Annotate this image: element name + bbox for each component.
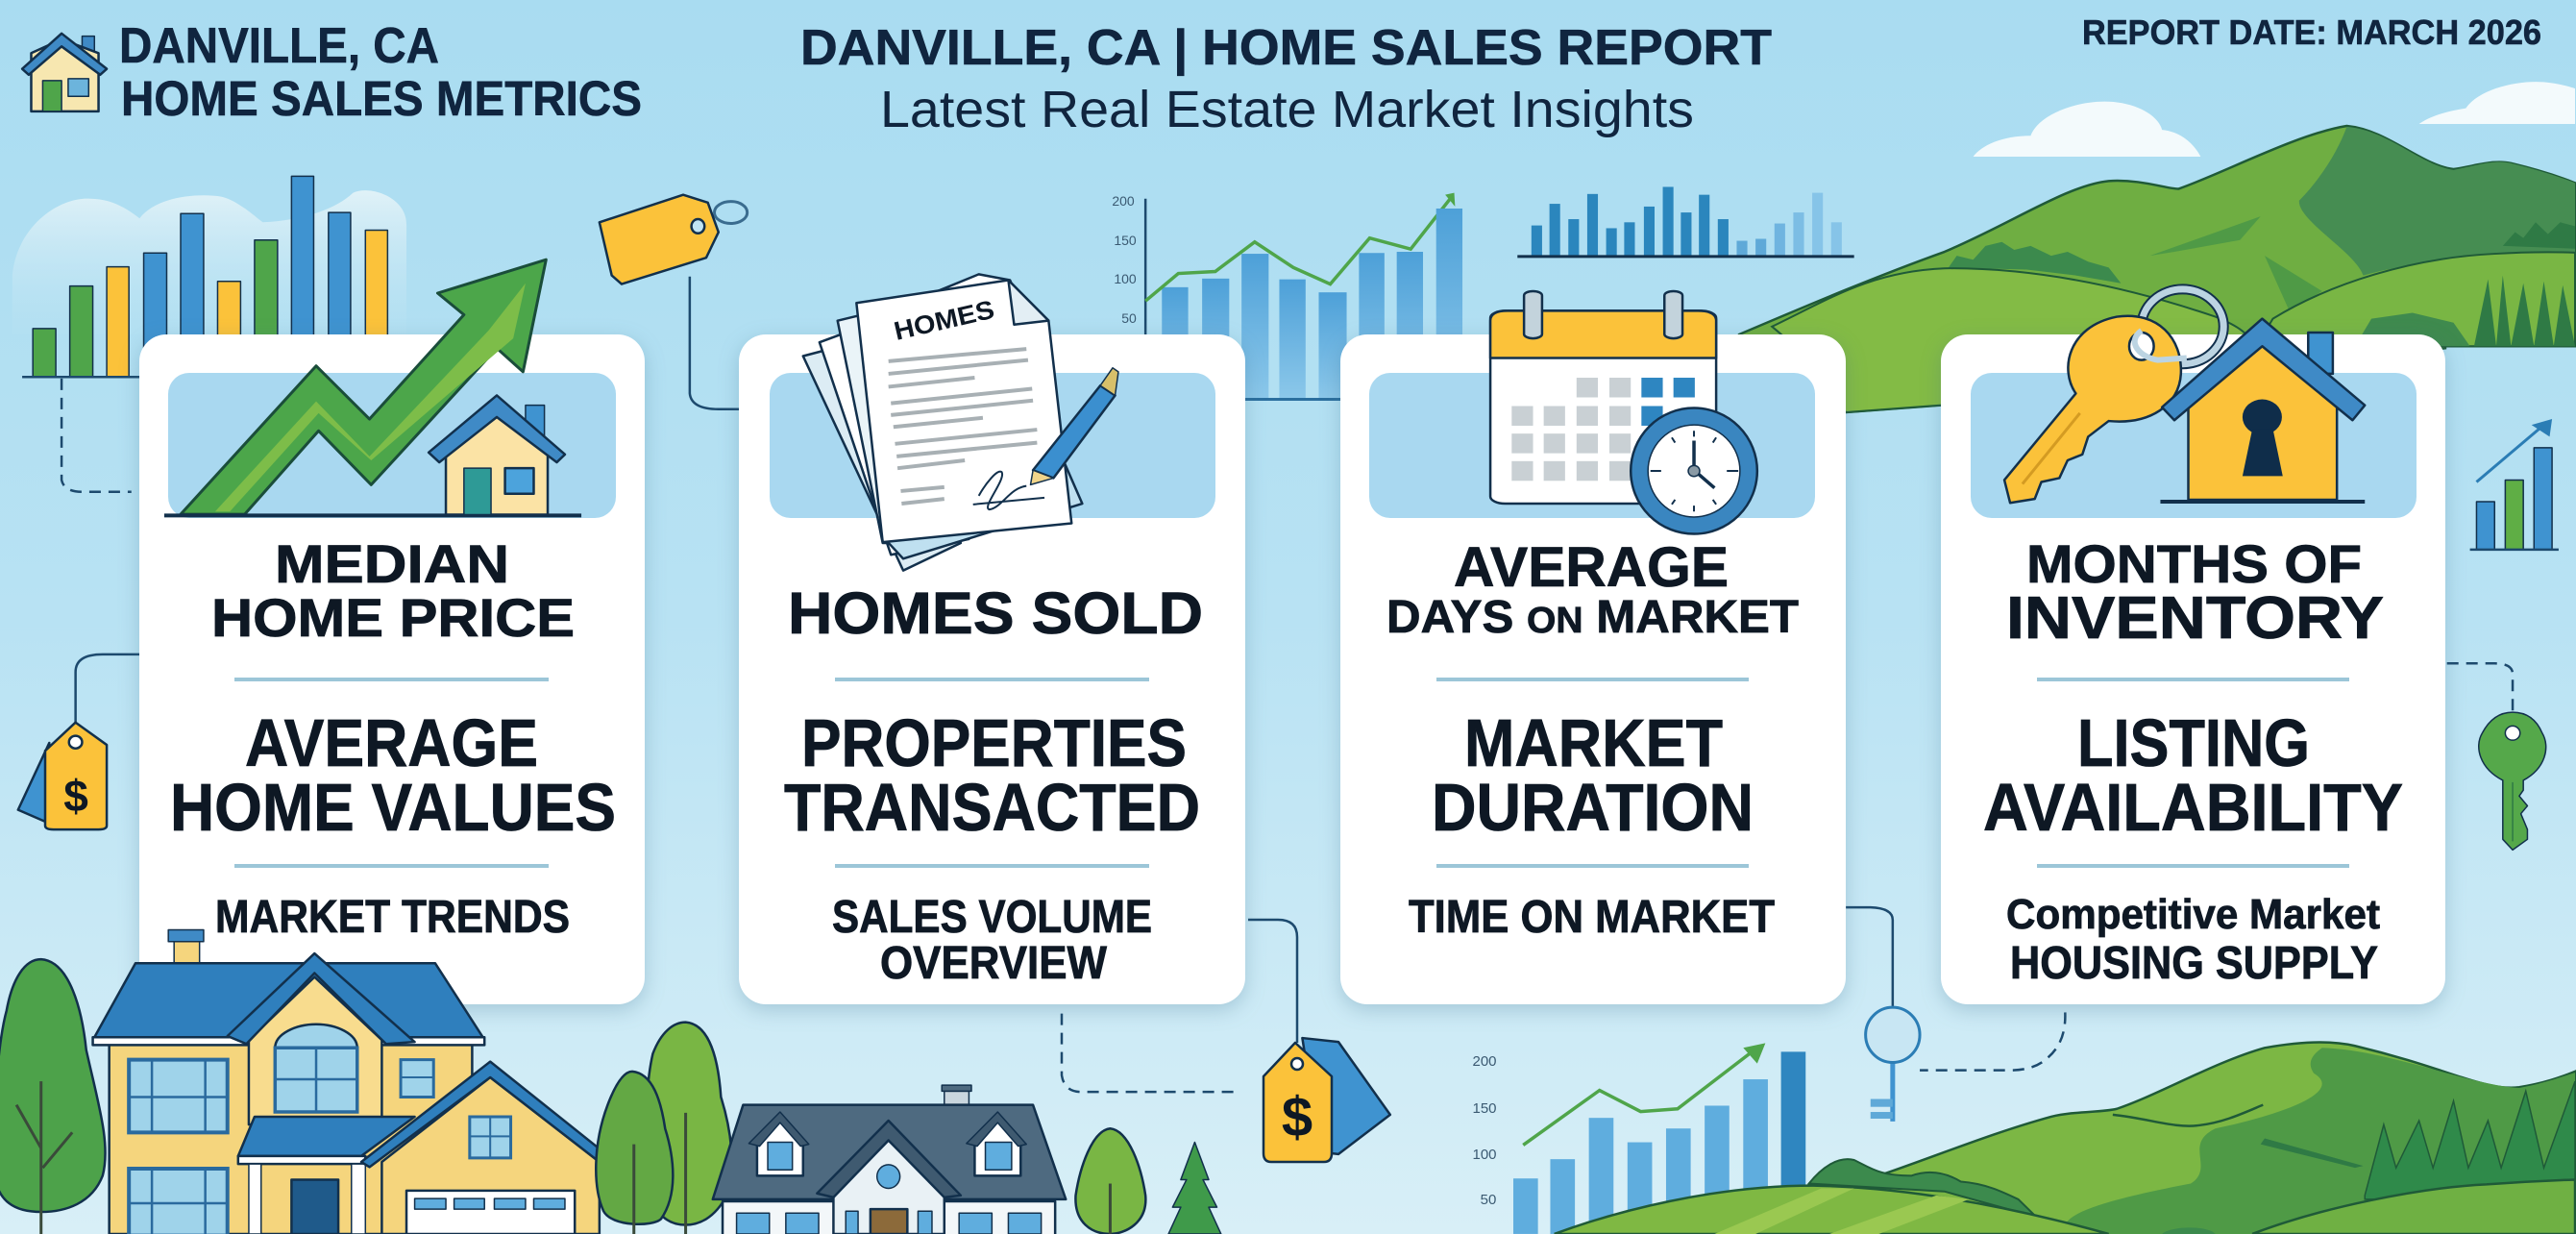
panel: average days on market card [1340, 334, 1846, 1004]
card text: median home price: MARKET TRENDS [215, 892, 570, 943]
title: danville home sales metrics block: HOME SALES METRICS [121, 71, 642, 126]
icon: price tag bottom: $ [1282, 1086, 1313, 1148]
report date: REPORT DATE: MARCH 2026 [2082, 12, 2541, 52]
card text: homes sold: SALES VOLUME [832, 892, 1152, 943]
icon: rising arrow and house [164, 259, 581, 515]
line and bar chart top center: 100 [1114, 271, 1137, 286]
card text: homes sold: PROPERTIES [801, 705, 1187, 780]
card text: homes sold: OVERVIEW [880, 938, 1108, 989]
card text: median home price: MEDIAN [275, 533, 509, 594]
icon: magnifier key [1866, 1007, 1920, 1122]
clouds top right [1974, 82, 2575, 157]
tree left [0, 959, 106, 1234]
line and bar chart top center: 200 [1112, 193, 1135, 209]
trees middle [596, 1023, 732, 1234]
card text: median home price: HOME PRICE [211, 587, 575, 648]
card text: average days on market: DAYS ON MARKET [1386, 592, 1799, 643]
card text: average days on market: DURATION [1432, 770, 1754, 845]
card text: months of inventory: Competitive Market [2006, 891, 2380, 938]
trees right of white house [1075, 1128, 1221, 1234]
card text: homes sold: HOMES SOLD [788, 580, 1203, 646]
icon: price tag left [18, 723, 107, 829]
line and bar chart bottom: 150 [1472, 1100, 1497, 1117]
title: report heading: DANVILLE, CA | HOME SALES REPORT [800, 20, 1772, 76]
line and bar chart top center [1065, 193, 1470, 400]
card text: median home price: AVERAGE [245, 705, 538, 780]
panel: months of inventory card [1941, 334, 2445, 1004]
cloud behind bars [12, 190, 406, 334]
subtitle: Latest Real Estate Market Insights [880, 81, 1694, 138]
card text: months of inventory: LISTING [2077, 705, 2310, 780]
line and bar chart bottom: 200 [1472, 1053, 1497, 1070]
line and bar chart bottom [1472, 1043, 1805, 1234]
panel: homes sold card [739, 334, 1245, 1004]
card text: months of inventory: MONTHS OF [2026, 533, 2362, 594]
card text: months of inventory: AVAILABILITY [1983, 770, 2403, 845]
icon: price tag left: $ [63, 771, 88, 821]
card text: average days on market: AVERAGE [1454, 536, 1729, 599]
card text: homes sold: TRANSACTED [784, 770, 1200, 845]
card text: months of inventory [1983, 533, 2403, 989]
line and bar chart top center: 150 [1114, 233, 1137, 248]
icon: price tag bottom [1263, 1038, 1390, 1162]
mini bar chart top [1517, 186, 1854, 257]
line and bar chart bottom: 100 [1472, 1147, 1497, 1163]
card text: average days on market: TIME ON MARKET [1409, 892, 1775, 943]
dashed connector left [61, 379, 132, 492]
card text: months of inventory: HOUSING SUPPLY [2010, 938, 2378, 989]
title: danville home sales metrics block: DANVILLE, CA [119, 18, 439, 74]
card text: median home price [170, 533, 616, 943]
icon: calendar and clock [1490, 291, 1757, 534]
panel: median home price card [139, 334, 645, 1004]
card text: homes sold [784, 580, 1203, 989]
icon: signed contract papers [803, 274, 1118, 571]
connector to homes sold card [690, 277, 743, 409]
small chart right [2470, 419, 2559, 550]
line and bar chart top center: 50 [1121, 310, 1137, 326]
connectors between cards [76, 654, 2513, 1092]
yellow price tag top [600, 195, 748, 284]
background mountains [1739, 126, 2575, 412]
foreground hills with pines [1555, 1043, 2575, 1234]
title: danville home sales metrics block [22, 18, 642, 126]
card text: average days on market: MARKET [1464, 705, 1723, 780]
line and bar chart bottom: 50 [1481, 1192, 1496, 1208]
bar chart left [12, 176, 406, 377]
large yellow house [93, 929, 616, 1234]
text on contract: HOMES [892, 295, 997, 346]
icon: key and house [2004, 289, 2365, 503]
card text: average days on market [1386, 536, 1799, 943]
icon: logo house [22, 34, 107, 111]
card text: months of inventory: INVENTORY [2006, 585, 2384, 652]
white and slate house [713, 1085, 1066, 1234]
icon: green key [2479, 712, 2546, 850]
card text: median home price: HOME VALUES [170, 770, 616, 845]
